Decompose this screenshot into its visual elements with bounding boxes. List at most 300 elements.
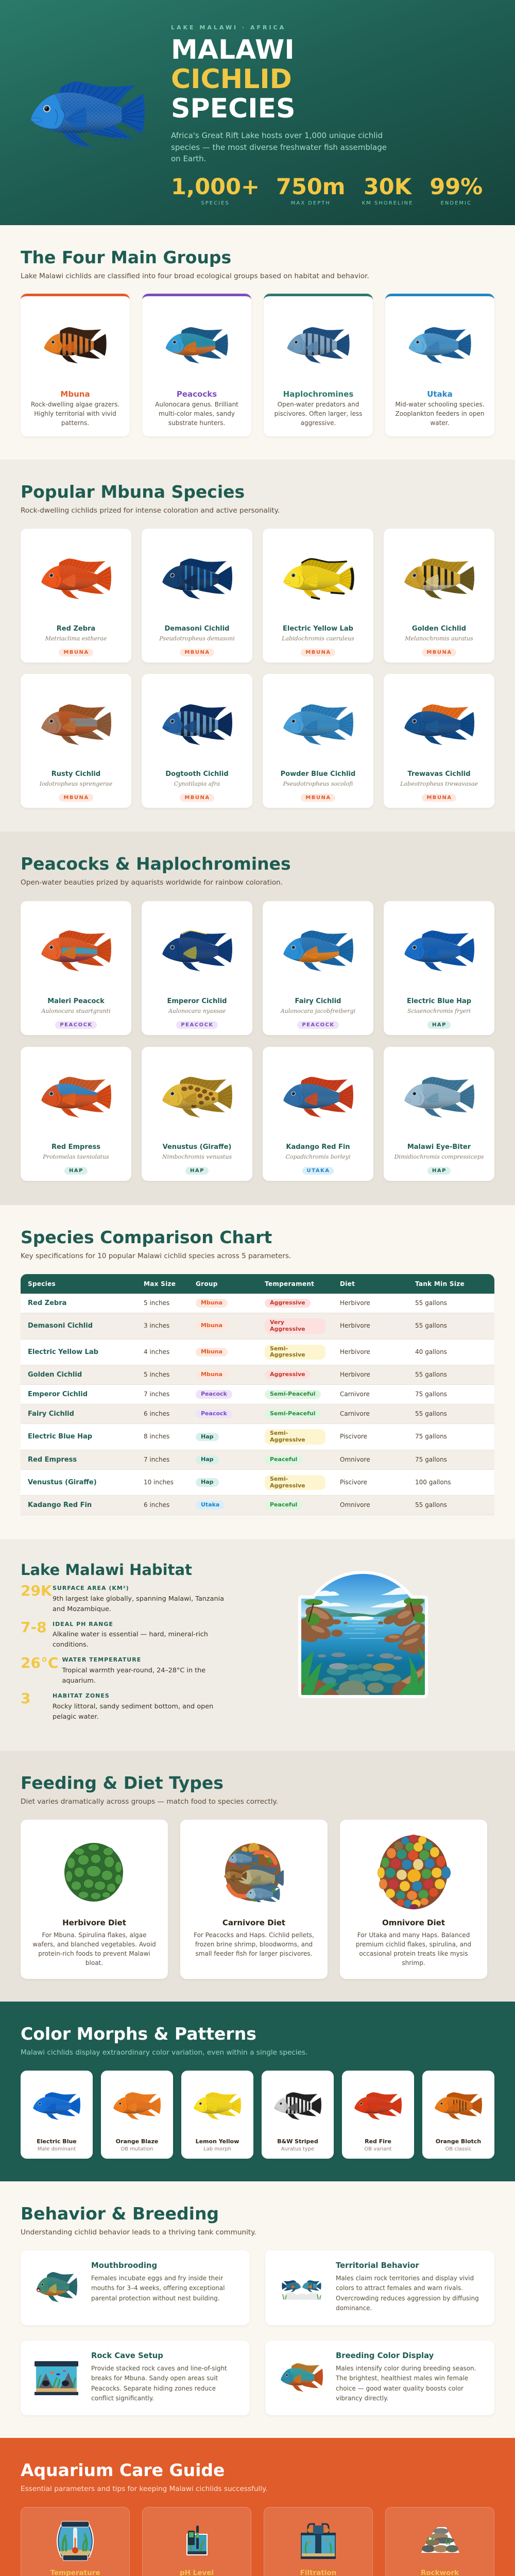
icon: fish: [163, 1077, 232, 1118]
name: Emperor Cichlid: [167, 997, 227, 1005]
stat: species: SPECIES: [201, 200, 230, 206]
card: Demasoni: [142, 529, 252, 663]
comparison table: Hap: [201, 1456, 214, 1463]
comparison table: 40 gallons: [415, 1348, 447, 1355]
icon: hap fish: [287, 327, 350, 364]
icon: fish: [283, 930, 353, 972]
icon: mbuna fish: [44, 327, 107, 364]
card: Fairy Cichlid: [263, 901, 373, 1035]
comparison table: Aggressive: [270, 1371, 305, 1378]
note: Auratus type: [281, 2146, 314, 2152]
scientific name: Metriaclima estherae: [45, 635, 107, 642]
icon: rock pile: [420, 2527, 460, 2553]
icon: fish: [283, 558, 354, 600]
fact number 3: 3: [21, 1690, 30, 1707]
tag: MBUNA: [184, 650, 210, 655]
card: herbivore diet: [21, 1820, 168, 1979]
habitat illustration: [298, 1571, 428, 1698]
tag: PEACOCK: [60, 1022, 93, 1028]
hero title: CICHLID: [171, 64, 292, 95]
title: Breeding Color Display: [336, 2351, 434, 2360]
tag: PEACOCK: [181, 1022, 214, 1028]
card: Red Zebra: [21, 529, 131, 663]
icon: fish: [41, 930, 111, 972]
description: colors to attract females and warn rivals.: [336, 2284, 463, 2292]
comparison table: Peaceful: [270, 1501, 297, 1508]
icon: fish: [33, 2092, 80, 2120]
description: Open-water predators and: [278, 401, 359, 408]
card: pH level: [142, 2507, 251, 2576]
card: Orange Blotch morph: [422, 2071, 494, 2159]
panel: lake malawi habitat: [0, 1539, 515, 1751]
comparison table: Venustus (Giraffe): [28, 1479, 97, 1486]
comparison table: Carnivore: [340, 1391, 370, 1398]
comparison table: Mbuna: [201, 1371, 222, 1378]
comparison table: Emperor Cichlid: [28, 1391, 88, 1398]
stat: depth: 750m: [276, 174, 346, 200]
scientific name: Melanochromis auratus: [405, 635, 473, 642]
name: Red Fire: [365, 2138, 391, 2145]
scientific name: Labidochromis caeruleus: [282, 635, 354, 642]
name: Haplochromines: [283, 389, 353, 399]
fact description: [62, 1666, 205, 1686]
comparison table: Piscivore: [340, 1433, 367, 1440]
name: Fairy Cichlid: [295, 997, 341, 1005]
description: choice — good water quality boosts color: [336, 2385, 464, 2392]
name: Orange Blotch: [436, 2138, 481, 2145]
name: Electric Yellow Lab: [283, 625, 353, 633]
scientific name: Aulonocara jacobfreibergi: [281, 1008, 355, 1014]
heading: The Four Main Groups: [21, 247, 231, 267]
name: Red Empress: [52, 1143, 100, 1151]
icon: fish: [274, 2092, 321, 2120]
description: Mid-water schooling species.: [395, 401, 485, 408]
title: Territorial Behavior: [336, 2261, 419, 2270]
tag: HAP: [190, 1168, 204, 1174]
comparison table: 55 gallons: [415, 1322, 447, 1329]
icon: peacock fish: [166, 327, 228, 364]
scientific name: Dimidiochromis compressiceps: [394, 1154, 484, 1160]
icon: cave aquarium: [35, 2361, 78, 2395]
comparison table: Mbuna: [201, 1348, 222, 1355]
scientific name: Pseudotropheus demasoni: [159, 635, 235, 642]
description: wafers, and blanched vegetables. Avoid: [32, 1941, 156, 1948]
tag: MBUNA: [426, 795, 452, 801]
comparison table: Aggressive: [270, 1299, 305, 1306]
description: [336, 2364, 476, 2403]
description: premium cichlid flakes, spirulina, and: [356, 1941, 471, 1948]
description: Peacocks. Separate hiding zones reduce: [91, 2385, 216, 2392]
comparison table: Very Aggressive: [270, 1319, 305, 1332]
subheading: Key specifications for 10 popular Malawi cichlid species across 5 parameters.: [21, 1252, 291, 1260]
card: breeding color display: [265, 2341, 494, 2415]
description: aggressive.: [301, 419, 336, 427]
comparison table: 55 gallons: [415, 1299, 447, 1307]
tag: MBUNA: [184, 795, 210, 801]
icon: fish: [435, 2092, 482, 2120]
description: piscivores. Often larger, less: [274, 410, 362, 417]
icon: colorful fish: [281, 2363, 323, 2392]
fact number 26C: 26°C: [21, 1654, 59, 1671]
heading: Behavior & Breeding: [21, 2204, 219, 2224]
name: Orange Blaze: [116, 2138, 158, 2145]
comparison table: Semi-Aggressive: [270, 1345, 305, 1358]
icon: meaty food ball: [224, 1842, 284, 1902]
note: Male dominant: [38, 2146, 76, 2152]
card: filtration: [264, 2507, 373, 2576]
comparison table: Hap: [201, 1479, 214, 1485]
fact description: aquarium.: [62, 1677, 96, 1685]
card: Malawi Eye-Biter: [384, 1047, 494, 1181]
title: Omnivore Diet: [382, 1918, 445, 1927]
name: Dogtooth Cichlid: [165, 770, 229, 778]
comparison table: 75 gallons: [415, 1433, 447, 1440]
card: Emperor Cichlid: [142, 901, 252, 1035]
fact description: Rocky littoral, sandy sediment bottom, and open: [53, 1702, 213, 1710]
panel: four main groups: [21, 250, 494, 437]
description: Aulonocara genus. Brilliant: [155, 401, 238, 408]
description: [180, 1930, 328, 1958]
comparison table: Semi-Peaceful: [270, 1391, 315, 1397]
icon: fish: [41, 704, 111, 745]
tag: MBUNA: [63, 795, 89, 801]
subheading: Open-water beauties prized by aquarists worldwide for rainbow coloration.: [21, 878, 283, 887]
icon: pellet ball: [376, 1835, 451, 1910]
hero banner: [0, 0, 515, 225]
comparison table: Golden Cichlid: [28, 1371, 82, 1379]
comparison table: Species: [28, 1280, 56, 1287]
card: Dogtooth Cichlid: [142, 674, 252, 808]
hero stats: [171, 174, 483, 206]
description: [340, 1930, 487, 1968]
card: Electric Yellow Lab: [263, 529, 373, 663]
comparison table: Semi-Aggressive: [270, 1430, 305, 1443]
comparison table: 3 inches: [144, 1322, 169, 1329]
name: Electric Blue Hap: [407, 997, 471, 1005]
icon: two fish facing off: [281, 2280, 322, 2300]
icon: fish: [113, 2092, 161, 2120]
fact number 7-8: 7-8: [21, 1619, 47, 1636]
panel: species comparison chart: [0, 1205, 515, 1539]
comparison table: Hap: [201, 1433, 214, 1440]
fact number 29K: 29K: [21, 1582, 52, 1599]
card: Haplochromines: [264, 294, 373, 436]
comparison table: Fairy Cichlid: [28, 1410, 74, 1418]
comparison table: Piscivore: [340, 1479, 367, 1486]
comparison table: Red Zebra: [28, 1299, 66, 1307]
description: dominance.: [336, 2304, 372, 2312]
hero eyebrow: LAKE MALAWI · AFRICA: [171, 24, 286, 31]
fact label: SURFACE AREA (KM²): [53, 1585, 129, 1591]
stat: species: 1,000+: [171, 174, 260, 200]
description: breaks for Mbuna. Sandy open areas suit: [91, 2375, 218, 2382]
icon: fish: [41, 558, 111, 600]
name: Peacocks: [177, 389, 217, 399]
tag: HAP: [432, 1022, 447, 1028]
description: [91, 2274, 225, 2303]
description: shrimp.: [402, 1959, 425, 1967]
icon: pH meter tank: [185, 2526, 209, 2556]
fact description: [53, 1701, 213, 1722]
comparison table: Max Size: [144, 1280, 176, 1287]
heading: Color Morphs & Patterns: [21, 2024, 256, 2044]
comparison table: Herbivore: [340, 1299, 370, 1307]
name: Utaka: [427, 389, 453, 399]
hero title: [171, 35, 296, 124]
comparison table: 7 inches: [144, 1456, 169, 1463]
description: For Peacocks and Haps. Cichlid pellets,: [194, 1931, 314, 1939]
panel: peacocks and haplochromines: [0, 832, 515, 1205]
comparison table: 10 inches: [144, 1479, 174, 1486]
card: Maleri Peacock: [21, 901, 131, 1035]
fact description: Tropical warmth year-round, 24–28°C in the: [62, 1667, 205, 1674]
description: [336, 2274, 479, 2313]
comparison table: Electric Blue Hap: [28, 1433, 92, 1440]
comparison table: Diet: [340, 1280, 355, 1287]
comparison table: Red Empress: [28, 1456, 77, 1464]
card: B&W Striped morph: [262, 2071, 334, 2159]
name: Venustus (Giraffe): [163, 1143, 231, 1151]
comparison table: Mbuna: [201, 1322, 222, 1329]
icon: filter tank: [301, 2522, 336, 2559]
comparison table: 6 inches: [144, 1501, 169, 1509]
stat: shoreline: 30K: [364, 174, 411, 200]
icon: thermometer tank: [55, 2520, 96, 2561]
comparison table: 5 inches: [144, 1299, 169, 1307]
title: Herbivore Diet: [62, 1918, 126, 1927]
comparison table: Carnivore: [340, 1410, 370, 1417]
comparison table: Tank Min Size: [415, 1280, 465, 1287]
description: Highly territorial with vivid: [34, 410, 116, 417]
heading: Peacocks & Haplochromines: [21, 854, 291, 874]
hero description: species — the most diverse freshwater fish assemblage: [171, 143, 387, 152]
comparison table: 75 gallons: [415, 1391, 447, 1398]
stat: shoreline: KM SHORELINE: [362, 200, 413, 206]
heading: Species Comparison Chart: [21, 1227, 272, 1247]
description: Rock-dwelling algae grazers.: [31, 401, 119, 408]
fact description: 9th largest lake globally, spanning Malawi, Tanzania: [53, 1595, 224, 1603]
scientific name: Sciaenochromis fryeri: [407, 1008, 471, 1014]
comparison table: 5 inches: [144, 1371, 169, 1378]
card: omnivore diet: [340, 1820, 487, 1979]
stat: endemic: 99%: [430, 174, 483, 200]
card: Red Empress: [21, 1047, 131, 1181]
name: Demasoni Cichlid: [164, 625, 230, 633]
comparison table: 4 inches: [144, 1348, 169, 1355]
icon: fish: [404, 1077, 474, 1118]
scientific name: Protomelas taeniolatus: [43, 1154, 109, 1160]
fact description: [53, 1594, 224, 1615]
description: occasional protein treats like mysis: [359, 1950, 468, 1957]
scientific name: Iodotropheus sprengerae: [40, 781, 112, 787]
fact label: HABITAT ZONES: [53, 1692, 110, 1699]
icon: fish: [283, 704, 353, 745]
comparison table: Utaka: [201, 1501, 219, 1508]
comparison table: Kadango Red Fin: [28, 1501, 92, 1509]
scientific name: Pseudotropheus socolofi: [283, 781, 353, 787]
name: Maleri Peacock: [47, 997, 105, 1005]
card: Red Fire morph: [342, 2071, 414, 2159]
description: frozen brine shrimp, bloodworms, and: [195, 1941, 313, 1948]
fact description: and Mozambique.: [53, 1605, 111, 1613]
name: Rusty Cichlid: [52, 770, 100, 778]
description: [395, 401, 485, 427]
name: Golden Cichlid: [412, 625, 466, 633]
icon: fish: [162, 930, 232, 972]
card: carnivore diet: [180, 1820, 328, 1979]
icon: algae ball: [64, 1842, 124, 1902]
description: patterns.: [61, 419, 89, 427]
description: vibrancy directly.: [336, 2395, 388, 2402]
note: OB variant: [364, 2146, 392, 2152]
name: Red Zebra: [57, 625, 95, 633]
description: Zooplankton feeders in open: [396, 410, 484, 417]
icon: hero blue cichlid: [31, 81, 145, 148]
name: Trewavas Cichlid: [407, 770, 471, 778]
icon: fish: [354, 2092, 402, 2120]
comparison table: 8 inches: [144, 1433, 169, 1440]
comparison table: 55 gallons: [415, 1371, 447, 1378]
card: rock cave setup: [21, 2341, 250, 2415]
scientific name: Labeotropheus trewavasae: [400, 781, 478, 787]
description: Males intensify color during breeding season.: [336, 2365, 476, 2372]
name: Mbuna: [60, 389, 90, 399]
description: substrate hunters.: [168, 419, 225, 427]
description: The brightest, healthiest males win female: [336, 2375, 468, 2382]
tag: PEACOCK: [302, 1022, 335, 1028]
panel: aquarium care guide: [0, 2438, 515, 2576]
tag: MBUNA: [305, 650, 331, 655]
comparison table: Temperament: [265, 1280, 314, 1287]
comparison table: [21, 1274, 494, 1515]
icon: fish: [41, 1077, 111, 1118]
heading: Aquarium Care Guide: [21, 2460, 225, 2480]
note: OB classic: [445, 2146, 472, 2152]
description: [91, 2364, 227, 2403]
name: Powder Blue Cichlid: [281, 770, 355, 778]
panel: feeding and diet types: [0, 1751, 515, 2002]
comparison table: Peacock: [201, 1391, 227, 1397]
subheading: Malawi cichlids display extraordinary color variation, even within a single species.: [21, 2048, 307, 2057]
stat: endemic: ENDEMIC: [441, 200, 472, 206]
fact label: IDEAL PH RANGE: [53, 1621, 113, 1628]
fact description: pelagic water.: [53, 1713, 99, 1721]
subheading: Lake Malawi cichlids are classified into four broad ecological groups based on habitat and behavior.: [21, 272, 369, 280]
note: Lab morph: [203, 2146, 231, 2152]
scientific name: Aulonocara stuartgranti: [41, 1008, 111, 1014]
icon: fish: [404, 930, 474, 972]
hero description: [171, 131, 387, 163]
hero description: Africa's Great Rift Lake hosts over 1,000 unique cichlid: [171, 131, 383, 140]
card: Rusty Cichlid: [21, 674, 131, 808]
comparison table: Herbivore: [340, 1322, 370, 1329]
description: protein-rich foods to prevent Malawi: [38, 1950, 150, 1957]
hero title: MALAWI: [171, 35, 295, 65]
panel: behavior and breeding: [21, 2207, 494, 2415]
card: Electric Blue Hap: [384, 901, 494, 1035]
description: small feeder fish for larger piscivores.: [196, 1950, 312, 1957]
description: Overcrowding reduces aggression by diffusing: [336, 2295, 479, 2302]
title: Carnivore Diet: [222, 1918, 285, 1927]
title: Rock Cave Setup: [91, 2351, 163, 2360]
card: mouthbrooding: [21, 2250, 250, 2325]
icon: mouthbrooding fish: [37, 2272, 77, 2302]
icon: fish: [163, 704, 232, 745]
icon: fish: [163, 558, 232, 600]
fact description: conditions.: [53, 1641, 89, 1649]
card: Trewavas: [384, 674, 494, 808]
description: water.: [431, 419, 449, 427]
subheading: Essential parameters and tips for keeping Malawi cichlids successfully.: [21, 2485, 267, 2493]
description: [155, 401, 238, 427]
tag: MBUNA: [426, 650, 452, 655]
panel: color morphs and patterns: [0, 2002, 515, 2181]
card: territorial behavior: [265, 2250, 494, 2325]
card: Utaka: [385, 294, 494, 436]
card: Venustus: [142, 1047, 252, 1181]
subheading: Understanding cichlid behavior leads to a thriving tank community.: [21, 2228, 256, 2236]
card: rockwork: [385, 2507, 494, 2576]
heading: Popular Mbuna Species: [21, 482, 245, 502]
description: bloat.: [85, 1959, 103, 1967]
description: Females incubate eggs and fry inside their: [91, 2275, 223, 2282]
tag: HAP: [69, 1168, 83, 1174]
card: Orange Blaze morph: [101, 2071, 173, 2159]
card: Kadango Red Fin: [263, 1047, 373, 1181]
heading: Feeding & Diet Types: [21, 1773, 224, 1793]
comparison table: 100 gallons: [415, 1479, 451, 1486]
tag: UTAKA: [307, 1168, 330, 1174]
name: Malawi Eye-Biter: [407, 1143, 471, 1151]
heading: Lake Malawi Habitat: [21, 1561, 192, 1579]
icon: fish: [283, 1077, 353, 1118]
description: [21, 1930, 168, 1968]
icon: fish: [405, 558, 474, 600]
name: Kadango Red Fin: [286, 1143, 350, 1151]
comparison table: 75 gallons: [415, 1456, 447, 1463]
card: Golden Cichlid: [384, 529, 494, 663]
comparison table: Peacock: [201, 1410, 227, 1417]
comparison table: 55 gallons: [415, 1501, 447, 1509]
card: Lemon Yellow morph: [181, 2071, 253, 2159]
scientific name: Nimbochromis venustus: [162, 1154, 232, 1160]
hero title: SPECIES: [171, 93, 296, 124]
subheading: Rock-dwelling cichlids prized for intense coloration and active personality.: [21, 506, 280, 515]
description: mouths for 3–4 weeks, offering exceptional: [91, 2284, 225, 2292]
comparison table: Omnivore: [340, 1501, 370, 1509]
description: parental protection without nest building.: [91, 2295, 220, 2302]
panel: popular mbuna species: [0, 460, 515, 832]
card: temperature: [21, 2507, 130, 2576]
description: [274, 401, 362, 427]
comparison table: Omnivore: [340, 1456, 370, 1463]
comparison table: Group: [196, 1280, 218, 1287]
fact description: [53, 1630, 208, 1650]
comparison table: Semi-Peaceful: [270, 1410, 315, 1417]
comparison table: 55 gallons: [415, 1410, 447, 1417]
comparison table: Herbivore: [340, 1371, 370, 1378]
tag: MBUNA: [63, 650, 89, 655]
description: [31, 401, 119, 427]
note: OB mutation: [121, 2146, 153, 2152]
name: B&W Striped: [277, 2138, 318, 2145]
icon: utaka fish: [409, 327, 471, 364]
name: Lemon Yellow: [196, 2138, 239, 2145]
scientific name: Copadichromis borleyi: [285, 1154, 351, 1160]
comparison table: 7 inches: [144, 1391, 169, 1398]
comparison table: Demasoni Cichlid: [28, 1322, 93, 1330]
description: Males claim rock territories and display vivid: [336, 2275, 474, 2282]
